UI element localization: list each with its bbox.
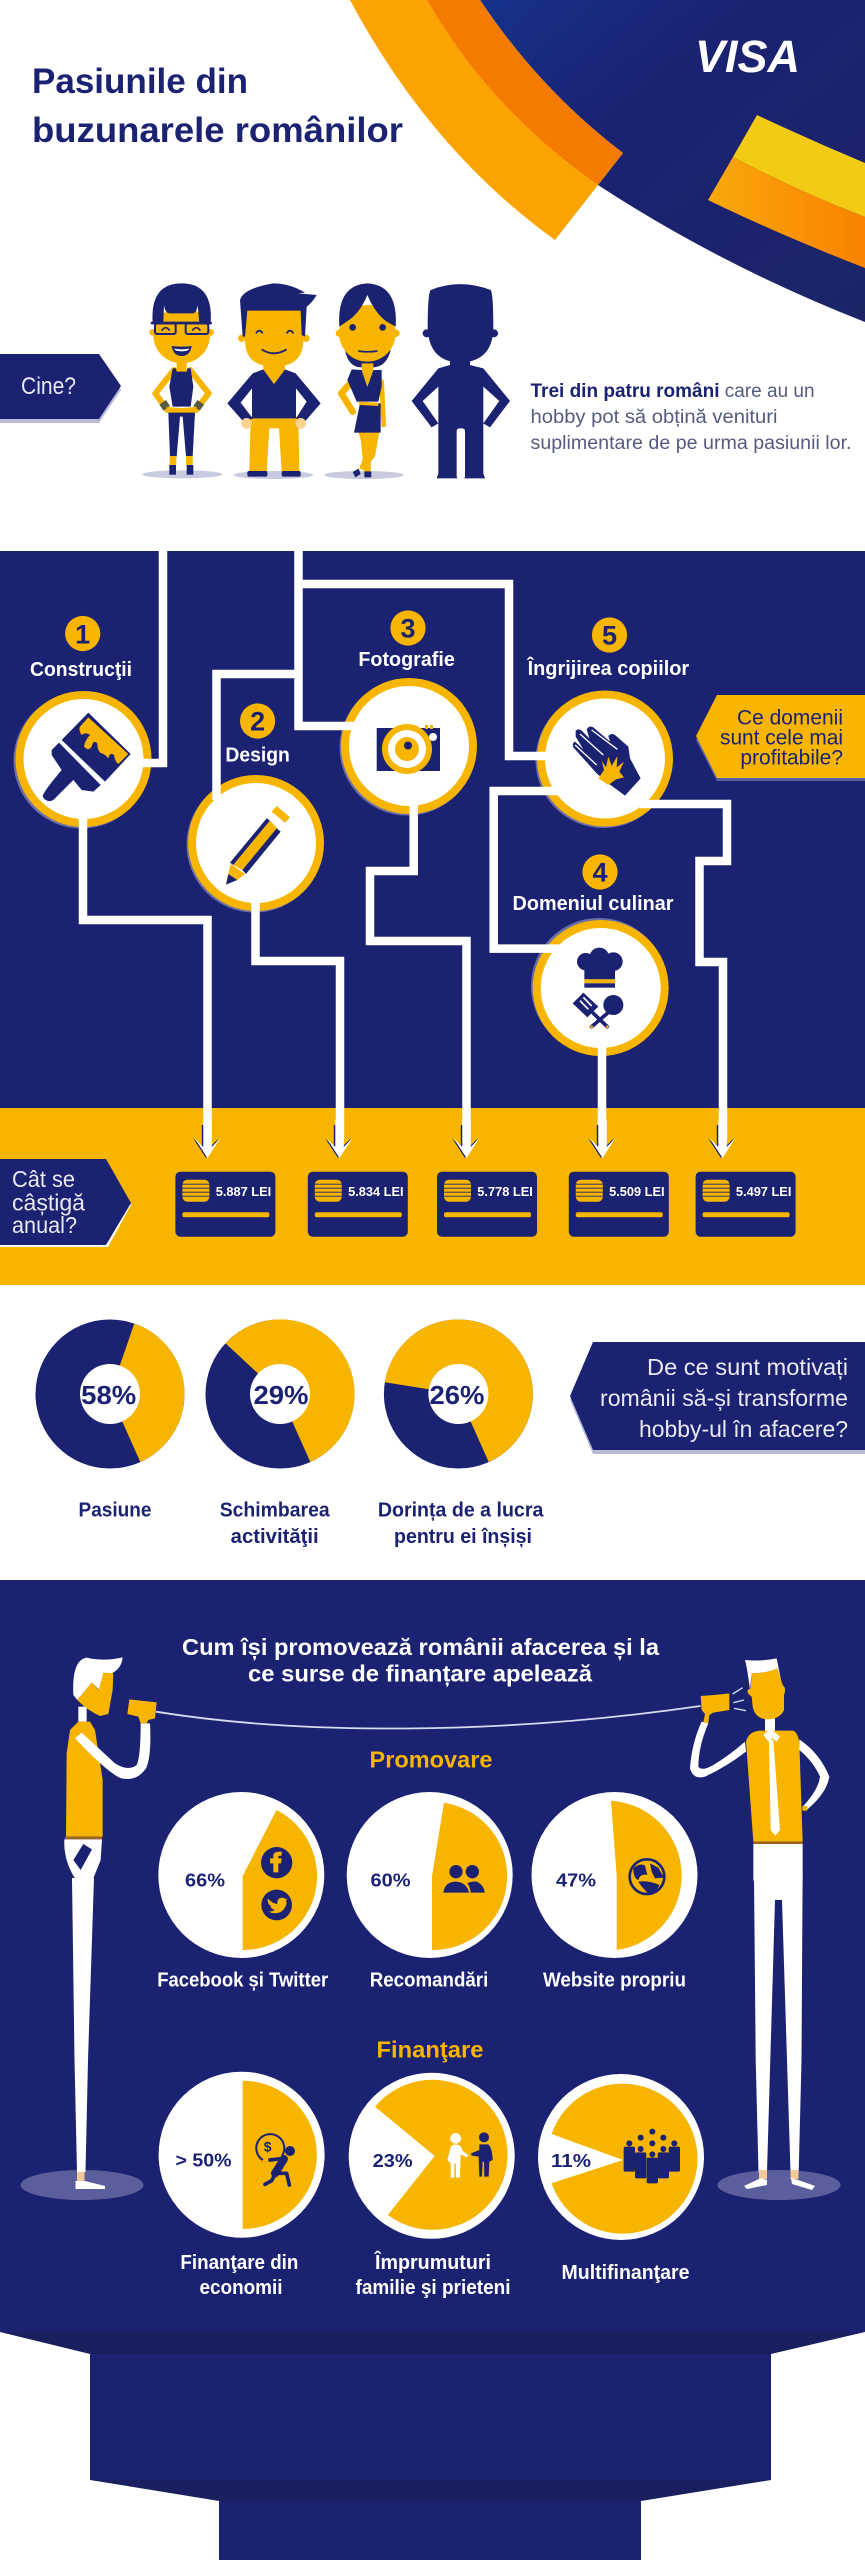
pie: Multifinanțare 11% xyxy=(538,2074,704,2284)
category 2: Design: Design xyxy=(225,744,290,766)
card: 5.509 LEI: 5.509 LEI xyxy=(609,1184,665,1199)
donut: Pasiune 58%: Pasiune xyxy=(78,1500,152,1522)
donut: Schimbarea activității 29%: Schimbarea xyxy=(220,1500,331,1522)
donut: Schimbarea activității 29% xyxy=(206,1319,355,1548)
category 5: Îngrijirea copiilor xyxy=(527,617,689,818)
icon: globe xyxy=(630,1859,664,1894)
connector lines xyxy=(83,540,727,1140)
pie: Website propriu 47%: Website propriu xyxy=(543,1970,686,1992)
label: Cine?: Cine? xyxy=(21,373,76,400)
icon: twitter xyxy=(261,1890,292,1920)
person 3: woman in dress xyxy=(324,283,404,479)
category 3: Fotografie: 3 xyxy=(400,614,416,644)
icon: person carrying coin xyxy=(254,2132,295,2185)
icon: paint brush xyxy=(43,713,131,801)
text block: who: suplimentare de pe urma pasiunii lor. xyxy=(530,433,852,454)
heading: promotion and funding: ce surse de finanțare apelează xyxy=(248,1661,592,1688)
callout: Ce domenii: profitabile? xyxy=(740,746,843,770)
icon: chef hat and utensils xyxy=(573,948,623,1028)
pie: Împrumuturi familie și prieteni 23%: 23% xyxy=(373,2150,413,2171)
card: 5.834 LEI xyxy=(308,1172,408,1237)
donut: Dorința de a lucra pentru ei înșiși 26%: pentru ei înșiși xyxy=(394,1526,532,1548)
category 4: Domeniul culinar: Domeniul culinar xyxy=(512,893,674,915)
pie: Recomandări 60% xyxy=(347,1792,513,1992)
card: 5.497 LEI xyxy=(696,1172,796,1237)
circle rings xyxy=(14,678,673,1056)
donut: Dorința de a lucra pentru ei înșiși 26% xyxy=(378,1319,544,1548)
card: 5.778 LEI xyxy=(437,1172,537,1237)
icon: pencil xyxy=(226,806,290,885)
label: Cât se câștigă anual?: Cât se xyxy=(12,1166,75,1192)
pie: Facebook și Twitter 66% xyxy=(157,1792,328,1992)
card: 5.778 LEI: 5.778 LEI xyxy=(477,1184,533,1199)
pie: Website propriu 47%: 47% xyxy=(556,1870,596,1891)
donut: Dorința de a lucra pentru ei înșiși 26%: Dorința de a lucra xyxy=(378,1500,544,1522)
text block: who: hobby pot să obțină venituri xyxy=(530,407,778,428)
callout: De ce sunt motivați xyxy=(570,1342,865,1454)
text block: who xyxy=(530,381,852,454)
category 5: Îngrijirea copiilor: 5 xyxy=(602,620,617,650)
card: 5.497 LEI: 5.497 LEI xyxy=(736,1184,791,1199)
person 1: woman with glasses xyxy=(142,283,222,478)
label: Cât se câștigă anual?: câștigă xyxy=(12,1190,85,1216)
panel: earnings background xyxy=(0,1108,865,1285)
heading: promotion and funding: Cum își promovează românii afacerea și la xyxy=(182,1634,659,1661)
pie: Finanțare din economii > 50%: > 50% xyxy=(176,2150,232,2171)
donut: Pasiune 58% xyxy=(36,1320,185,1522)
characters: four people xyxy=(142,283,510,479)
panel: domains background xyxy=(0,551,865,1108)
icon: handshake xyxy=(447,2132,493,2178)
pie: Împrumuturi familie și prieteni 23% xyxy=(349,2073,515,2299)
left man with cup xyxy=(20,1657,157,2200)
label: Cine? xyxy=(0,354,121,423)
card: 5.834 LEI: 5.834 LEI xyxy=(348,1184,404,1199)
pie: Finanțare din economii > 50% xyxy=(159,2072,325,2299)
title: buzunarele românilor xyxy=(32,111,403,150)
category 3: Fotografie: Fotografie xyxy=(358,649,455,671)
label: Cât se câștigă anual?: anual? xyxy=(12,1212,77,1238)
heading: Finanțare: Finanţare xyxy=(376,2037,484,2063)
callout: Ce domenii: sunt cele mai xyxy=(720,726,843,750)
pie: Website propriu 47% xyxy=(532,1792,698,1992)
card: 5.887 LEI xyxy=(175,1172,275,1237)
category 2: Design: 2 xyxy=(250,706,265,736)
icon: facebook xyxy=(261,1847,292,1878)
category 5: Îngrijirea copiilor: Îngrijirea copiilor xyxy=(527,656,689,680)
icon: person carrying coin: $ xyxy=(264,2139,272,2155)
person 4: silhouette xyxy=(412,284,510,479)
title: Pasiunile din xyxy=(32,62,248,101)
icon: people xyxy=(443,1865,485,1893)
category 2: Design xyxy=(196,703,316,903)
card: 5.887 LEI: 5.887 LEI xyxy=(216,1184,271,1199)
pie: Finanțare din economii > 50%: Finanţare din xyxy=(180,2252,298,2274)
title xyxy=(32,62,403,150)
pie: Multifinanțare 11%: Multifinanţare xyxy=(562,2262,690,2284)
header: decorative curved bands xyxy=(350,0,865,322)
donut: Schimbarea activității 29%: activităţii xyxy=(231,1526,319,1548)
category 4: Domeniul culinar xyxy=(512,854,674,1048)
category 4: Domeniul culinar: 4 xyxy=(592,858,608,888)
category 1: Construcții xyxy=(24,616,144,819)
logo: VISA: VISA xyxy=(695,31,800,82)
heading: Promovare: Promovare xyxy=(370,1747,492,1773)
callout: De ce sunt motivați: românii să-și transforme xyxy=(600,1385,848,1411)
card: 5.509 LEI xyxy=(569,1172,669,1237)
pie: Împrumuturi familie și prieteni 23%: Împrumuturi xyxy=(374,2250,491,2274)
arrows xyxy=(193,1120,736,1158)
string between cups xyxy=(156,1706,700,1729)
right man with cup xyxy=(690,1658,840,2200)
pie: Multifinanțare 11%: 11% xyxy=(551,2150,591,2171)
category 1: Construcții: 1 xyxy=(75,620,90,650)
callout: Ce domenii: Ce domenii xyxy=(737,706,843,730)
panel: promotion and funding background xyxy=(0,1580,865,2560)
pie: Recomandări 60%: 60% xyxy=(370,1870,410,1891)
icon: crowd xyxy=(624,2129,680,2183)
donut: Schimbarea activității 29%: 29% xyxy=(254,1380,308,1410)
pie: Facebook și Twitter 66%: Facebook și Twitter xyxy=(157,1970,328,1992)
icon: camera xyxy=(377,724,440,774)
category 1: Construcții: Construcţii xyxy=(30,659,132,681)
donut: Pasiune 58%: 58% xyxy=(81,1380,136,1410)
callout: De ce sunt motivați: De ce sunt motivați xyxy=(647,1354,848,1380)
person 2: man xyxy=(227,283,321,479)
text block: who: Trei din patru români care au un xyxy=(530,381,815,402)
callout: Ce domenii xyxy=(696,695,865,781)
donut: Dorința de a lucra pentru ei înșiși 26%: 26% xyxy=(430,1380,484,1410)
pie: Finanțare din economii > 50%: economii xyxy=(200,2277,282,2299)
label: Cât se câștigă anual? xyxy=(0,1159,131,1247)
icon: hands xyxy=(573,727,641,796)
heading: promotion and funding xyxy=(182,1634,659,1688)
callout: De ce sunt motivați: hobby-ul în afacere? xyxy=(639,1416,848,1442)
pie: Recomandări 60%: Recomandări xyxy=(370,1970,488,1992)
pie: Împrumuturi familie și prieteni 23%: familie şi prieteni xyxy=(356,2277,510,2299)
pie: Facebook și Twitter 66%: 66% xyxy=(185,1870,225,1891)
category 3: Fotografie xyxy=(349,610,469,806)
